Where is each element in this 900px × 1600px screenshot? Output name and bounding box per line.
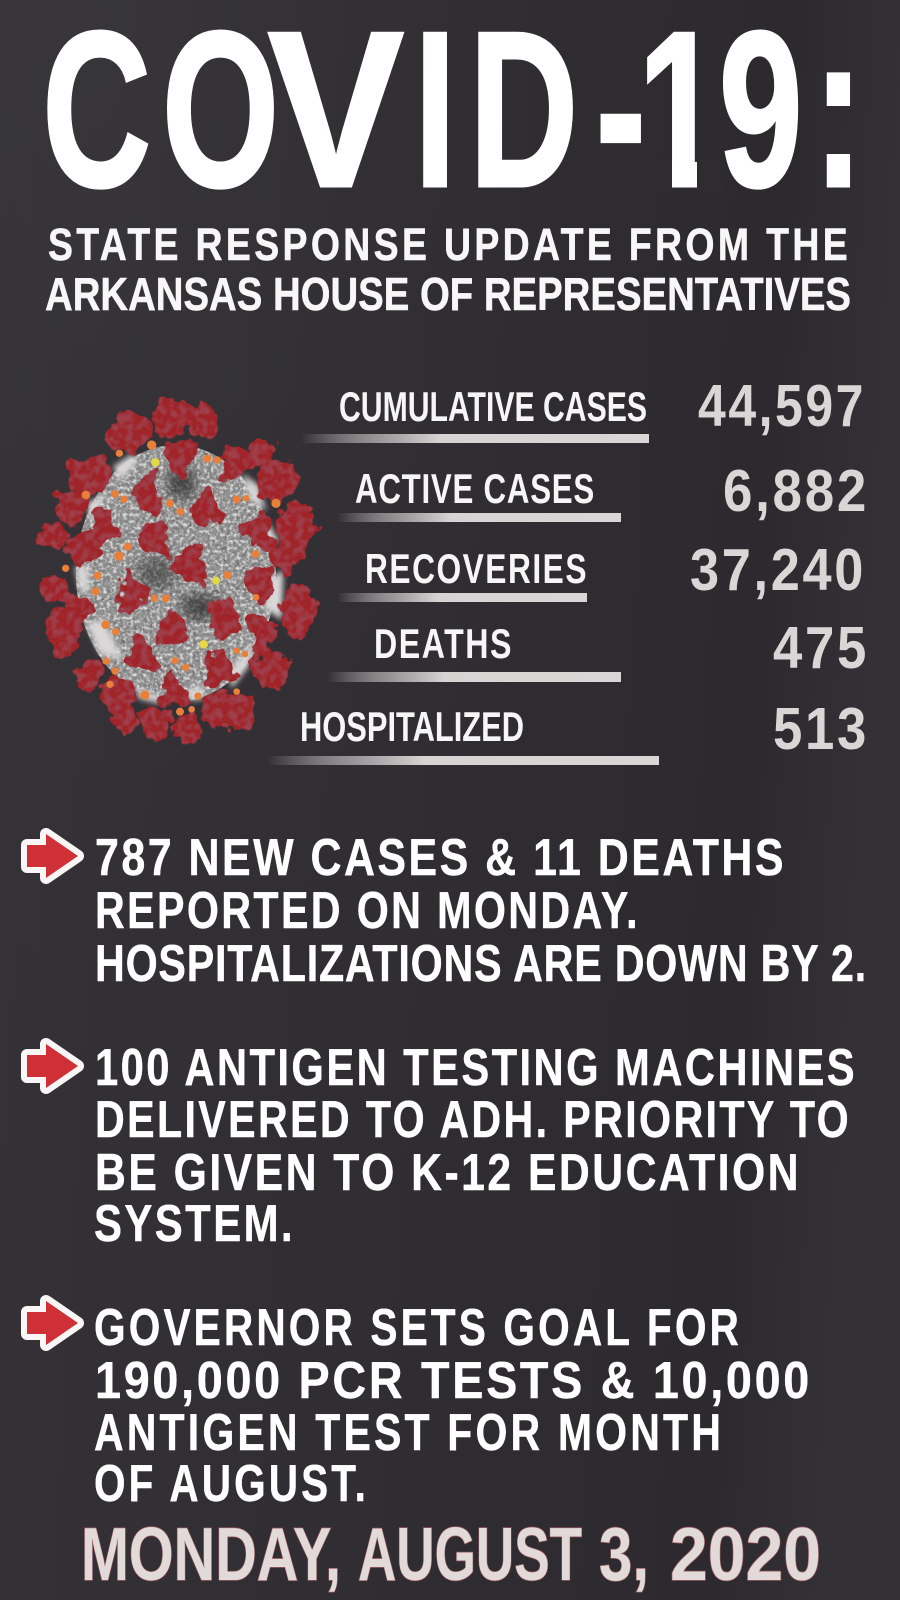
stat: active cases xyxy=(337,458,869,524)
bullet 2 xyxy=(27,1039,857,1253)
stat: recoveries: 37,240 xyxy=(690,537,866,603)
text: governor goal: GOVERNOR SETS GOAL FOR xyxy=(94,1299,742,1357)
text: governor goal: OF AUGUST. xyxy=(94,1455,369,1513)
stat: active cases: 6,882 xyxy=(723,458,869,524)
text: governor goal: 190,000 PCR TESTS & 10,000 xyxy=(95,1352,812,1410)
stat: active cases: ACTIVE CASES xyxy=(355,465,595,512)
text: governor goal: ANTIGEN TEST FOR MONTH xyxy=(94,1404,724,1462)
text: new cases xyxy=(95,829,867,993)
text: antigen machines: SYSTEM. xyxy=(94,1195,295,1253)
icon: red arrow 1 xyxy=(27,834,78,878)
text: new cases: REPORTED ON MONDAY. xyxy=(95,882,640,940)
stat: deaths: 475 xyxy=(773,615,869,681)
stat: deaths xyxy=(327,615,869,682)
icon: red arrow 2 xyxy=(27,1044,78,1088)
stat: deaths: DEATHS xyxy=(374,620,513,667)
stat: cumulative cases xyxy=(301,373,866,443)
date footer xyxy=(81,1512,821,1596)
text: governor goal xyxy=(94,1299,812,1513)
stat: hospitalized: HOSPITALIZED xyxy=(300,703,524,750)
bullet 3 xyxy=(27,1299,812,1513)
date footer: 2020 xyxy=(670,1512,821,1596)
stat: cumulative cases: CUMULATIVE CASES xyxy=(339,383,647,430)
stat: recoveries xyxy=(337,537,866,603)
date footer: 3, xyxy=(599,1512,649,1596)
subtitle xyxy=(45,219,851,320)
virus illustration xyxy=(39,397,316,743)
title xyxy=(42,0,864,234)
stat: hospitalized xyxy=(267,696,869,765)
date footer: MONDAY, xyxy=(81,1512,341,1596)
icon: red arrow 3 xyxy=(27,1301,78,1345)
bullet 1 xyxy=(27,829,867,993)
stat: hospitalized: 513 xyxy=(773,696,869,762)
stat: recoveries: RECOVERIES xyxy=(365,545,588,592)
text: antigen machines xyxy=(94,1039,857,1253)
date footer: AUGUST xyxy=(358,1512,582,1596)
stats panel xyxy=(267,373,869,765)
stat: cumulative cases: 44,597 xyxy=(698,373,866,439)
